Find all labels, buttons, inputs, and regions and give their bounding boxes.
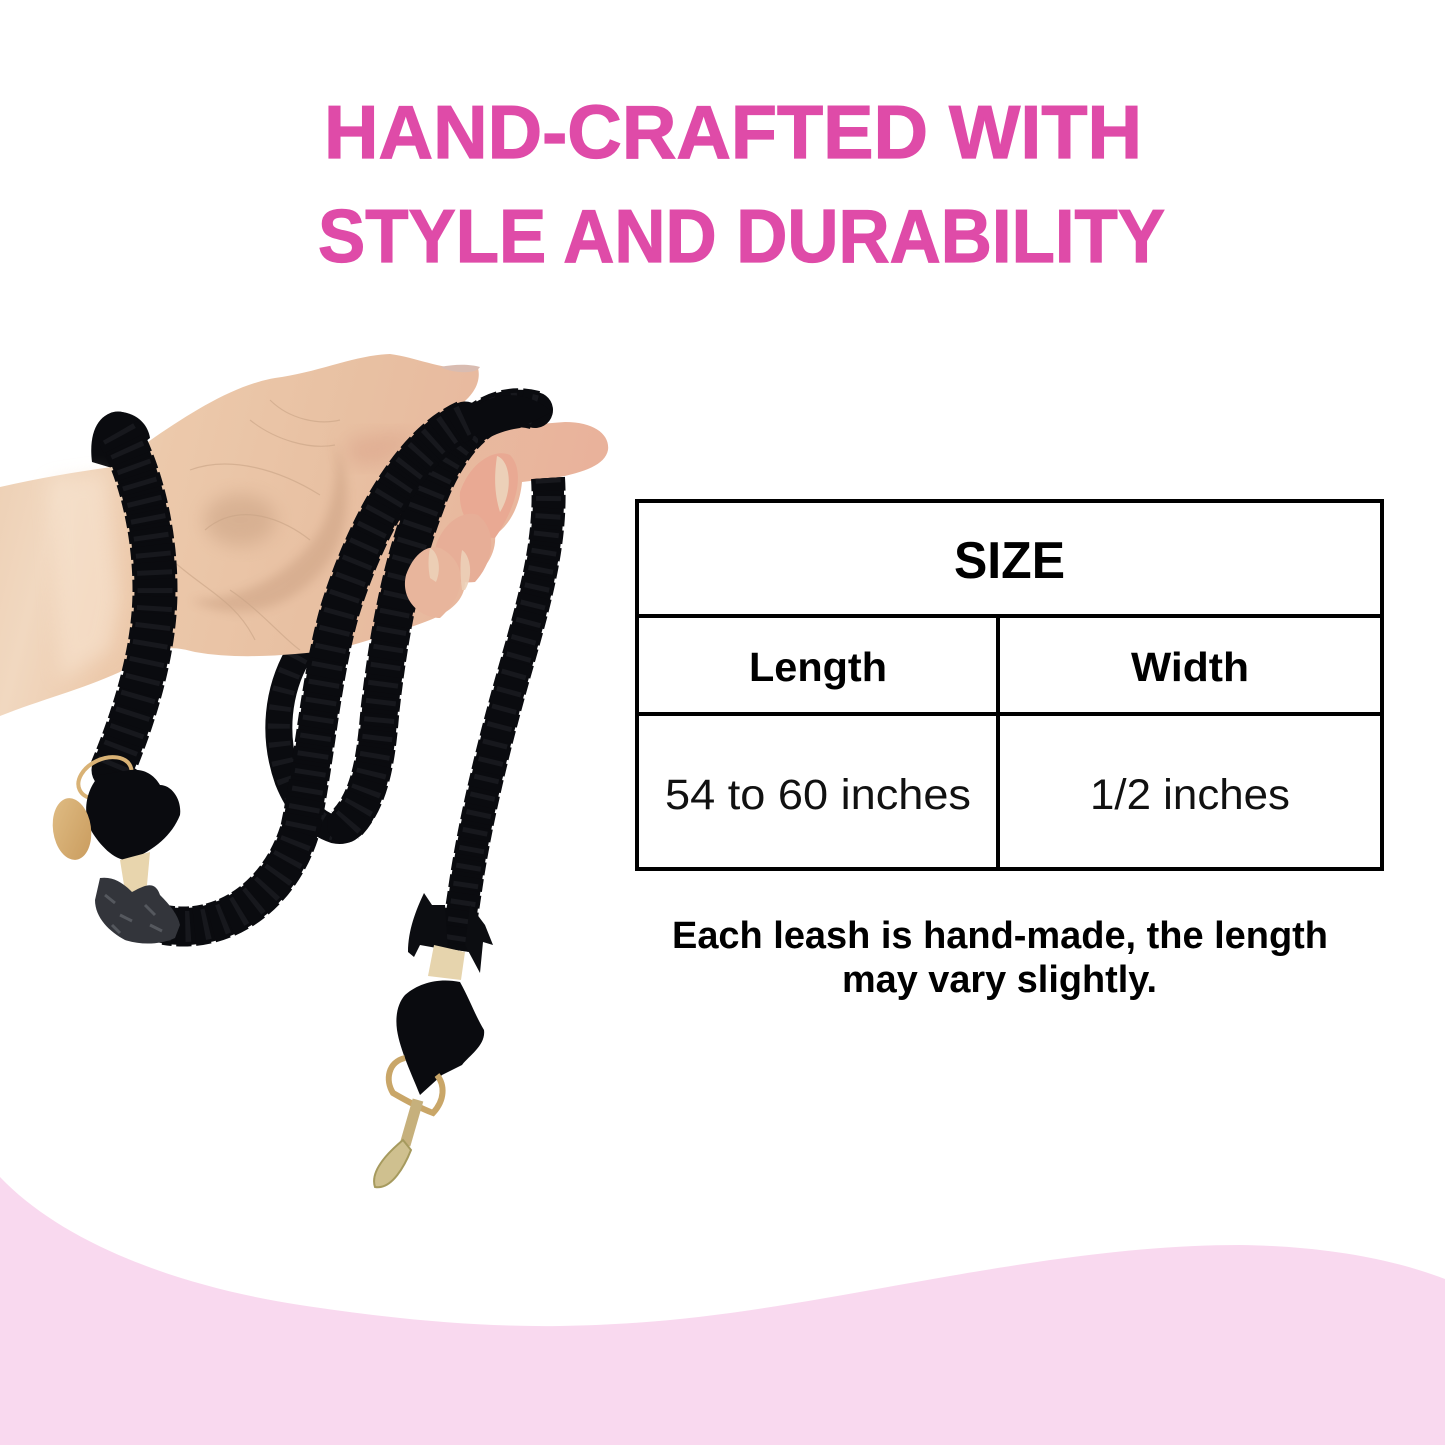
cream wrap, lower rope xyxy=(428,945,465,980)
finger nails xyxy=(428,456,509,590)
wrist highlight xyxy=(50,474,120,680)
wrist loop rope xyxy=(112,432,155,770)
brass snap hook xyxy=(374,1058,443,1187)
column header: width: Width xyxy=(1131,644,1249,690)
column header: length: Length xyxy=(749,644,887,690)
gold ring xyxy=(72,749,138,807)
table grid xyxy=(637,501,1382,869)
rope: long strand through hand xyxy=(345,408,535,825)
thumb mound shading xyxy=(190,440,347,612)
pink wave background xyxy=(0,1177,1445,1445)
title: STYLE AND DURABILITY xyxy=(318,194,1165,278)
rope loop behind hand xyxy=(91,412,372,831)
rope knot near collar xyxy=(86,770,180,860)
note text: Each leash is hand-made, the length xyxy=(672,915,1328,957)
note text xyxy=(672,915,1328,1001)
frayed fringe, lower rope xyxy=(408,893,493,973)
rope over index finger xyxy=(478,395,552,444)
gold tag xyxy=(49,796,95,862)
table heading: SIZE xyxy=(954,532,1065,590)
thumb shadow xyxy=(345,433,420,465)
lower rope knot xyxy=(396,981,484,1095)
size table xyxy=(637,501,1382,869)
right hanging rope xyxy=(456,478,549,950)
hand and forearm xyxy=(0,354,608,716)
fingers over rope xyxy=(405,453,518,618)
palm shadow xyxy=(204,494,276,546)
value: width: 1/2 inches xyxy=(1090,771,1290,819)
frayed grey rope end xyxy=(95,878,180,944)
note text: may vary slightly. xyxy=(842,959,1157,1001)
rope: front strand to frayed splice xyxy=(165,420,465,927)
value: length: 54 to 60 inches xyxy=(665,771,971,819)
photo: hand holding black rope leash xyxy=(0,354,608,1187)
title xyxy=(318,90,1165,278)
palm creases xyxy=(172,400,340,650)
title: HAND-CRAFTED WITH xyxy=(324,90,1142,174)
cream wrap collar xyxy=(120,852,150,898)
thumb nail xyxy=(440,365,480,372)
